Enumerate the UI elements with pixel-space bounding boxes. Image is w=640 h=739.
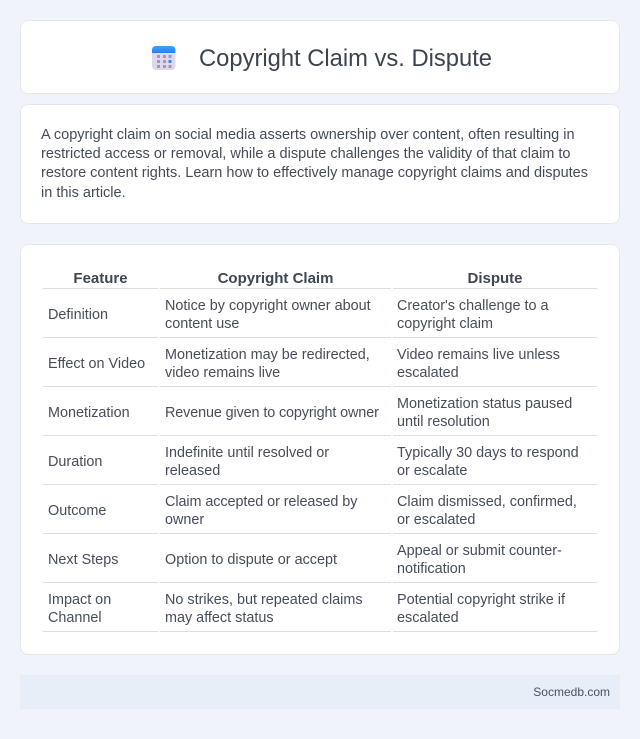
row: Next Steps: notification [397,561,466,577]
panel: comparison table [20,244,620,655]
row: Monetization: Monetization status paused [397,396,572,412]
row: Next Steps: Appeal or submit counter- [397,543,562,559]
text block: introduction: in this article. [41,185,126,201]
table header: Dispute [467,270,522,287]
row: Monetization [48,396,572,430]
row: Outcome: or escalated [397,512,475,528]
row: Outcome [48,494,577,528]
row: Impact on Channel [48,592,566,626]
row: Definition [48,298,549,332]
row: Next Steps: Next Steps [48,552,118,568]
row: Impact on Channel: Channel [48,610,102,626]
row: Definition: Definition [48,307,108,323]
row: Duration: Indefinite until resolved or [165,445,329,461]
text block: introduction: restore content rights. Learn how to effectively manage copyright claims and disputes [41,165,588,181]
row: Outcome: owner [165,512,204,528]
title: Copyright Claim vs. Dispute [199,45,492,72]
row: Effect on Video: Effect on Video [48,356,145,372]
table header: Feature [73,270,128,287]
footer bar [20,675,620,709]
row: Outcome: Claim accepted or released by [165,494,357,510]
row: Duration: released [165,463,220,479]
row: Impact on Channel: may affect status [165,610,274,626]
row: Outcome: Outcome [48,503,106,519]
footer credit: Socmedb.com [533,685,610,699]
row: Outcome: Claim dismissed, confirmed, [397,494,577,510]
row: Effect on Video [48,347,560,381]
row: Definition: Creator's challenge to a [397,298,549,314]
row: Next Steps [48,543,562,577]
row: Duration [48,445,579,479]
row: Next Steps: Option to dispute or accept [165,552,337,568]
row: Monetization: until resolution [397,414,490,430]
row: Effect on Video: video remains live [165,365,280,381]
row: Impact on Channel: Impact on [48,592,111,608]
row: Monetization: Revenue given to copyright owner [165,405,379,421]
row: Duration: Duration [48,454,102,470]
row: Definition: copyright claim [397,316,493,332]
text block: introduction: restricted access or removal, while a dispute challenges the validity of that claim to [41,146,570,162]
row: Impact on Channel: No strikes, but repeated claims [165,592,363,608]
row: Definition: Notice by copyright owner about [165,298,371,314]
row: Effect on Video: Monetization may be redirected, [165,347,370,363]
panel: title card [20,20,620,94]
icon: calendar [152,46,176,70]
row: Monetization: Monetization [48,405,130,421]
row: Duration: Typically 30 days to respond [397,445,579,461]
table header [73,270,522,287]
row: Impact on Channel: Potential copyright strike if [397,592,565,608]
row: Definition: content use [165,316,239,332]
text block: introduction [41,127,588,201]
table header: Copyright Claim [218,270,333,287]
comparison table [43,270,597,632]
row: Effect on Video: Video remains live unless [397,347,560,363]
row: Duration: or escalate [397,463,467,479]
row: Effect on Video: escalated [397,365,459,381]
panel: introduction [20,104,620,224]
row: Impact on Channel: escalated [397,610,459,626]
text block: introduction: A copyright claim on social media asserts ownership over content, often resulting in [41,127,575,143]
